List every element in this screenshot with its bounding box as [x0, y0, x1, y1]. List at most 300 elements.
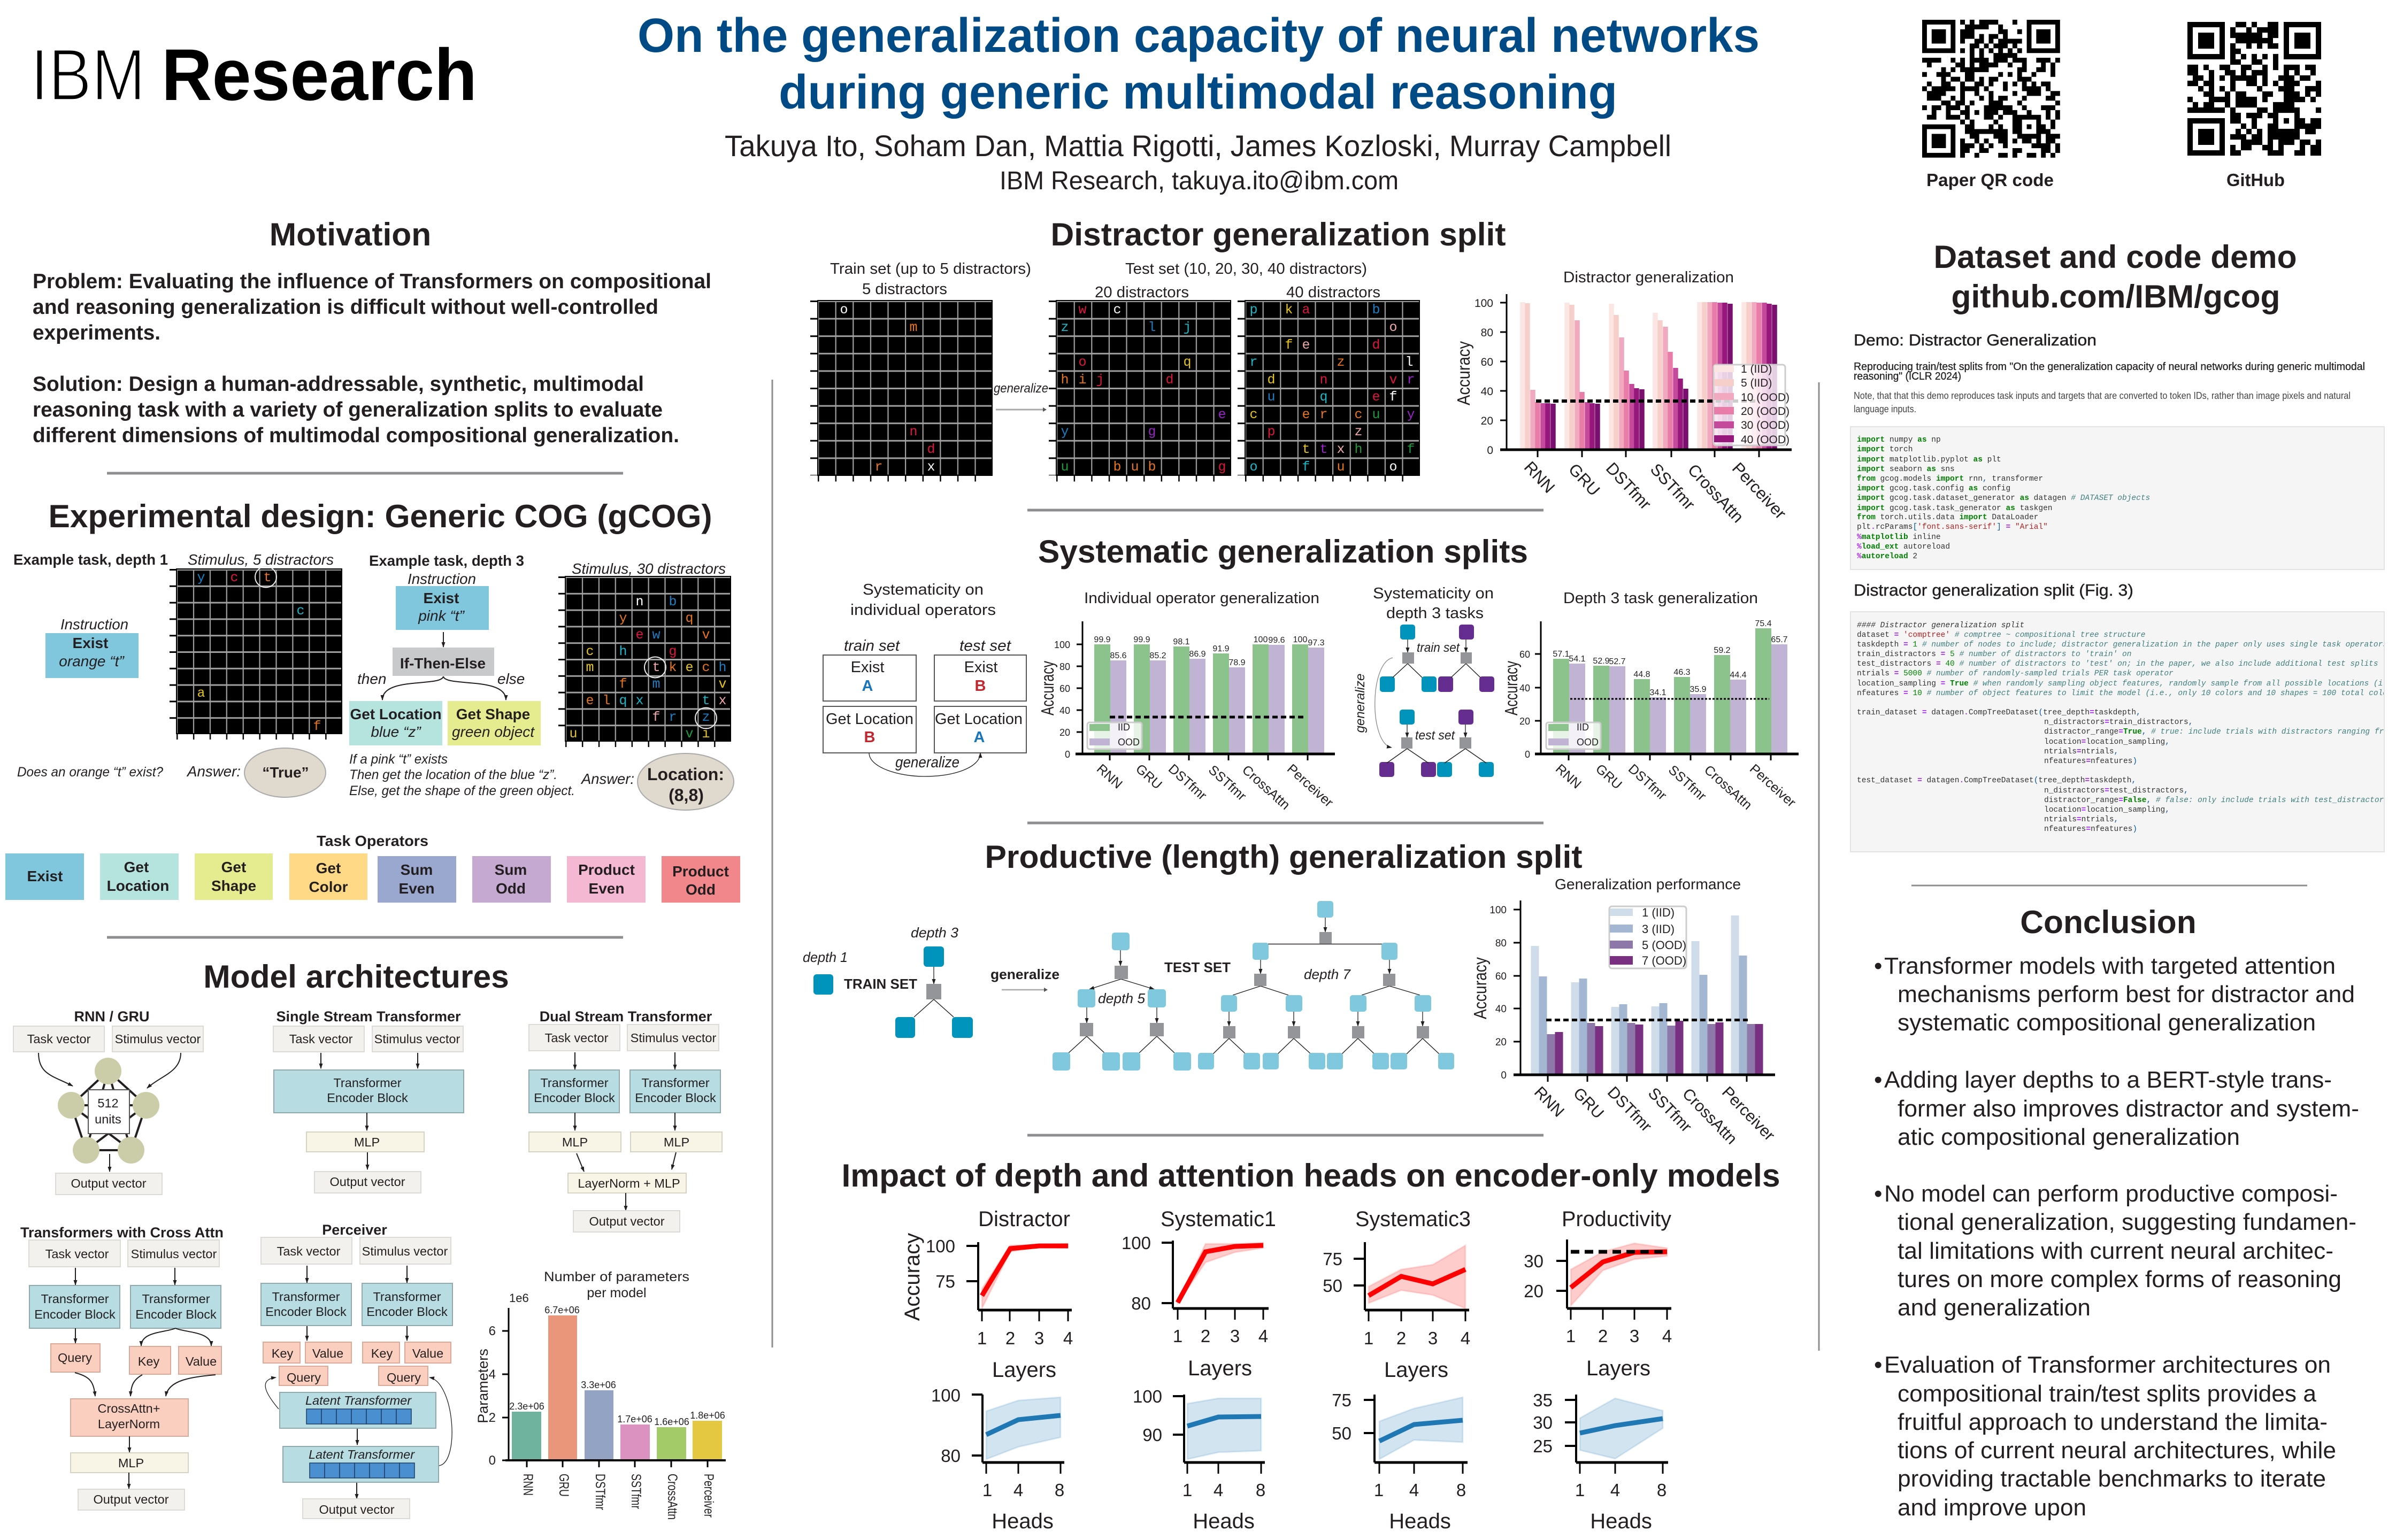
diagram: depth 3 test set trees	[1379, 710, 1494, 777]
box: exist pink t	[396, 586, 489, 630]
chart: depth 3 task generalization: OOD	[1577, 737, 1599, 748]
operator boxes: train and test: Get Location	[826, 711, 913, 728]
chart: systematic3 heads: Heads	[1389, 1510, 1451, 1533]
diagram: perceiver: Task vector	[277, 1244, 341, 1258]
arrow: generalize arc	[869, 753, 980, 776]
label: then: then	[357, 671, 386, 687]
chart: systematic3 heads: 1	[1374, 1480, 1384, 1500]
chart: individual operator generalization: 60	[1059, 683, 1070, 694]
stimulus grid: 30 distractors: v	[718, 676, 727, 692]
code block: dataset split: location=location_sampling,	[2044, 738, 2170, 746]
chart: distractor generalization: Perceiver	[1729, 459, 1790, 523]
label: systematicity on depth 3 tasks: Systematicity on	[1373, 585, 1494, 602]
chart: distractor generalization: 0	[1487, 444, 1493, 457]
chart: distractor layers: 100	[926, 1236, 955, 1256]
chart: number of parameters per model: 1e6	[509, 1291, 529, 1305]
grid: test 40 distractors: p	[1267, 424, 1276, 440]
stimulus grid: 30 distractors: x	[718, 693, 727, 709]
chart: individual operator generalization: Accuracy	[1038, 661, 1057, 715]
box: get shape green object	[448, 701, 541, 745]
code block: dataset split: nfeatures = 10 # number of object features to limit the model (i.e., only 10 colors and 10 shapes = 100 total colored	[1857, 689, 2396, 698]
code block: dataset split: distractor_range=False, # false: only include trials with test_distractors	[2044, 796, 2389, 805]
grid: test 40 distractors: b	[1372, 302, 1380, 318]
heading: Motivation: Motivation	[270, 216, 431, 252]
stimulus grid: 5 distractors: y	[197, 570, 205, 586]
chart: individual operator generalization: 20	[1059, 727, 1070, 738]
text block: depth 3 explanation	[349, 752, 575, 798]
chart: individual operator generalization: Perceiver	[1284, 761, 1336, 810]
code block: imports: import torch	[1857, 445, 1913, 454]
chart: distractor generalization: 20 (OOD)	[1741, 405, 1790, 418]
grid: test 40 distractors: y	[1407, 407, 1415, 422]
chart: depth 3 task generalization: 75.4	[1755, 619, 1772, 628]
stimulus grid: 30 distractors: u	[569, 726, 578, 742]
chart: number of parameters per model	[475, 1269, 726, 1520]
chart: distractor heads: 8	[1055, 1480, 1064, 1500]
diagram: RNN / GRU	[13, 1008, 203, 1195]
chart: systematic1 heads: Heads	[1193, 1510, 1255, 1533]
QR code: GitHub	[2187, 22, 2321, 190]
code block: imports: import gcog.task.dataset_generator as datagen # DATASET objects	[1857, 494, 2150, 503]
chart: productivity layers: 3	[1630, 1326, 1639, 1346]
chart: individual operator generalization: 85.6	[1110, 651, 1127, 660]
diagram: perceiver: Key	[272, 1346, 293, 1360]
text block: problem and solution: different dimensions of multimodal compositional generalization.	[33, 424, 679, 447]
text block: problem and solution: Problem: Evaluating the influence of Transformers on compositional	[33, 270, 711, 293]
grid: train 5 distractors: n	[909, 424, 918, 440]
code block: dataset split	[1850, 612, 2396, 852]
chart: depth 3 task generalization: 59.2	[1714, 646, 1731, 655]
label: 40 distractors: 40 distractors	[1286, 284, 1380, 301]
code block: imports: import seaborn as sns	[1857, 465, 1955, 474]
chart: individual operator generalization: SSTfmr	[1205, 763, 1249, 804]
chart: depth 3 task generalization: RNN	[1553, 761, 1584, 792]
bullet text: conclusions: tional generalization, suggesting fundamen-	[1898, 1209, 2356, 1235]
chart: productivity heads: Heads	[1590, 1510, 1652, 1533]
chart: individual operator generalization: 99.9	[1133, 635, 1150, 644]
chart: systematic3 layers	[1323, 1207, 1471, 1382]
diagram: perceiver: Query	[287, 1370, 321, 1384]
chart: systematic1 heads: 8	[1256, 1480, 1265, 1500]
grid: test 40 distractors: u	[1337, 459, 1345, 475]
diagram: single stream transformer: MLP	[354, 1135, 380, 1149]
grid: test 40 distractors: v	[1389, 372, 1397, 388]
code block: imports: from gcog.models import rnn, transformer	[1857, 475, 2043, 483]
bullet text: conclusions: former also improves distractor and system-	[1898, 1096, 2359, 1122]
chart: distractor generalization: 20	[1481, 415, 1493, 427]
diagram: single stream transformer: Stimulus vector	[374, 1032, 460, 1046]
chart: number of parameters per model: 0	[489, 1453, 496, 1468]
chart: generalization performance: Generalization performance	[1555, 876, 1741, 892]
chart: systematic1 layers: Layers	[1188, 1357, 1252, 1380]
chart: generalization performance: 7 (OOD)	[1642, 954, 1686, 967]
diagram: perceiver: Value	[412, 1346, 443, 1360]
diagram: single stream transformer	[273, 1008, 464, 1193]
stimulus grid: 30 distractors: q	[685, 611, 694, 626]
chart: individual operator generalization: 85.2	[1149, 651, 1166, 660]
bullet text: conclusions: Transformer models with targeted attention	[1884, 953, 2336, 979]
chart: generalization performance: 1 (IID)	[1642, 906, 1675, 919]
chart: depth 3 task generalization: 20	[1519, 716, 1530, 727]
chart: distractor generalization: 30 (OOD)	[1741, 419, 1790, 432]
heading: model architectures: Model architectures	[203, 958, 509, 995]
chart: number of parameters per model: SSTfmr	[628, 1474, 643, 1509]
grid: test 40 distractors: f	[1285, 337, 1293, 353]
grid: test 20 distractors: o	[1078, 355, 1087, 370]
chart: generalization performance: 20	[1495, 1037, 1507, 1048]
grid: test 40 distractors: c	[1354, 407, 1363, 422]
bullet text: conclusions: tions of current neural architectures, while	[1898, 1437, 2336, 1464]
diagram: dual stream transformer: Transformer	[540, 1076, 609, 1090]
chart: systematic1 heads: 4	[1214, 1480, 1223, 1500]
chart: number of parameters per model: 2.3e+06	[509, 1401, 544, 1412]
bullet text: conclusions: •	[1874, 1352, 1882, 1378]
bullet text: conclusions: Evaluation of Transformer architectures on	[1884, 1352, 2331, 1378]
stimulus grid: 30 distractors: q	[619, 693, 627, 709]
label: train set: TRAIN SET	[844, 976, 917, 992]
chart: depth 3 task generalization: GRU	[1593, 761, 1625, 792]
heading: task operators: Task Operators	[317, 833, 428, 849]
chart: generalization performance: 5 (OOD)	[1642, 938, 1686, 952]
stimulus grid: 30 distractors: v	[685, 726, 694, 742]
arrow: branching curve	[382, 676, 506, 700]
diagram: transformers with cross attn: Transformers with Cross Attn	[20, 1225, 224, 1241]
answer bubble: location: (8,8)	[669, 786, 704, 805]
grid: train 5 distractors: x	[927, 459, 935, 475]
operator boxes: Odd	[496, 880, 526, 897]
chart: number of parameters per model: 4	[489, 1367, 496, 1382]
chart: depth 3 task generalization: 57.1	[1553, 650, 1570, 659]
diagram: transformers with cross attn: Encoder Block	[34, 1307, 116, 1321]
diagram: perceiver: Stimulus vector	[362, 1244, 448, 1258]
chart: distractor heads: 1	[982, 1480, 992, 1500]
stimulus grid: 30 distractors: n	[635, 594, 644, 610]
chart: distractor generalization: RNN	[1520, 458, 1558, 497]
chart: depth 3 task generalization: 52.9	[1593, 657, 1610, 666]
operator boxes: Get	[124, 859, 149, 875]
chart: individual operator generalization: 86.9	[1189, 650, 1206, 659]
answer bubble: location	[638, 753, 734, 810]
heading: distractor generalization split: Distractor generalization split	[1050, 216, 1506, 252]
grid: test 40 distractors: h	[1354, 442, 1363, 457]
grid: test 20 distractors: j	[1096, 372, 1104, 388]
bullet text: conclusions: and generalization	[1898, 1295, 2091, 1321]
diagram: transformers with cross attn: LayerNorm	[98, 1417, 160, 1431]
chart: depth 3 task generalization: 0	[1525, 749, 1530, 760]
diagram: transformers with cross attn: Output vector	[93, 1492, 169, 1506]
grid: test 40 distractors: r	[1249, 355, 1258, 370]
box: get shape green object: Get Shape	[456, 706, 530, 722]
code block: imports	[1850, 427, 2384, 569]
code block: imports: %autoreload 2	[1857, 552, 1917, 561]
chart: productivity layers: Productivity	[1562, 1207, 1671, 1231]
vertical column divider left	[771, 380, 773, 1348]
title: during generic multimodal reasoning	[779, 66, 1617, 119]
grid: test 20 distractors: w	[1078, 302, 1087, 318]
text block: reproducing: Reproducing train/test splits from "On the generalization capacity of neural networks during generic multimodal	[1854, 361, 2365, 373]
heading: conclusion: Conclusion	[2020, 904, 2197, 940]
stimulus grid: 30 distractors: c	[586, 644, 594, 659]
chart: generalization performance: 80	[1495, 938, 1507, 949]
chart: distractor heads: 80	[941, 1446, 961, 1466]
chart: systematic1 heads	[1133, 1387, 1265, 1533]
text block: depth 3 explanation: Then get the location of the blue “z”.	[349, 767, 557, 782]
operator boxes: Exist	[27, 868, 63, 884]
arrow: generalize arc: generalize	[895, 754, 959, 771]
diagram: transformers with cross attn: Query	[58, 1351, 92, 1365]
code block: dataset split: taskdepth = 1 # number of nodes to include; distractor generalization in the paper only uses single task operators	[1857, 641, 2387, 649]
panel: dataset and code demo	[1850, 238, 2396, 852]
heading: systematic generalization splits: Systematic generalization splits	[1038, 533, 1528, 569]
stimulus grid: 30 distractors: t	[702, 693, 710, 709]
axis label: accuracy: Accuracy	[901, 1233, 924, 1321]
chart: number of parameters per model: DSTfmr	[593, 1474, 608, 1510]
chart: distractor generalization: GRU	[1565, 460, 1603, 499]
stimulus grid: 30 distractors: e	[586, 693, 594, 709]
chart: depth 3 task generalization: 54.1	[1569, 654, 1586, 664]
operator boxes: train and test: B	[864, 729, 875, 746]
code block: imports: %load_ext autoreload	[1857, 543, 1950, 551]
grid: test 40 distractors: f	[1389, 389, 1397, 405]
grid: test 40 distractors: o	[1389, 459, 1397, 475]
diagram: perceiver: Encoder Block	[265, 1305, 347, 1319]
chart: productivity layers: 1	[1566, 1326, 1576, 1346]
chart: individual operator generalization: 97.3	[1308, 638, 1325, 648]
grid: train 5 distractors: o	[840, 302, 848, 318]
chart: individual operator generalization: 100	[1054, 640, 1070, 650]
stimulus grid: 5 distractors: c	[230, 570, 239, 586]
chart: number of parameters per model: 2	[489, 1411, 496, 1425]
chart: systematic3 heads: 50	[1332, 1423, 1351, 1443]
label: example task depth 3: Example task, depth 3	[369, 552, 524, 569]
bullet text: conclusions: •	[1874, 1181, 1882, 1207]
grid: test 40 distractors: e	[1302, 407, 1310, 422]
heading: experimental design: Experimental design: Generic COG (gCOG)	[48, 498, 712, 534]
chart: distractor generalization: 80	[1481, 327, 1493, 339]
diagram: RNN / GRU: Output vector	[71, 1176, 147, 1190]
label: stimulus 30 distractors: Stimulus, 30 distractors	[572, 560, 726, 577]
operator boxes: Product	[578, 861, 635, 878]
panel: systematic generalization splits	[823, 533, 1799, 813]
diagram: transformers with cross attn: Encoder Block	[135, 1307, 217, 1321]
chart: depth 3 task generalization: 44.8	[1633, 670, 1650, 679]
diagram: transformers with cross attn: Value	[186, 1354, 217, 1368]
chart: number of parameters per model: 6.7e+06	[544, 1305, 580, 1315]
node: train set depth 1	[813, 974, 833, 995]
chart: depth 3 task generalization: SSTfmr	[1665, 763, 1709, 804]
chart: individual operator generalization: Individual operator generalization	[1084, 590, 1319, 607]
diagram: dual stream transformer: Dual Stream Transformer	[540, 1008, 712, 1025]
chart: individual operator generalization: 78.9	[1228, 658, 1246, 667]
chart: systematic3 heads: 8	[1456, 1480, 1466, 1500]
grid: test 40 distractors: d	[1267, 372, 1276, 388]
chart: productivity layers: 20	[1524, 1281, 1543, 1301]
chart: number of parameters per model: CrossAttn	[665, 1474, 680, 1520]
chart: number of parameters per model: Perceiver	[701, 1474, 716, 1518]
operator boxes: Sum	[495, 861, 527, 878]
stimulus grid: 30 distractors: h	[619, 644, 627, 659]
diagram: perceiver: Value	[312, 1346, 343, 1360]
code block: dataset split: n_distractors=test_distractors,	[2044, 787, 2188, 795]
chart: distractor generalization: 1 (IID)	[1741, 363, 1772, 375]
diagram: perceiver: Encoder Block	[366, 1305, 448, 1319]
operator boxes: Sum	[401, 861, 433, 878]
stimulus grid: 30 distractors: w	[652, 627, 661, 643]
arrow: generalize depth 3: generalize	[1353, 674, 1368, 733]
label: systematicity on individual operators: individual operators	[850, 602, 996, 619]
logo: IBM Research	[30, 34, 477, 116]
box: exist orange t	[45, 633, 139, 678]
chart: distractor generalization: 5 (IID)	[1741, 377, 1772, 389]
label: else: else	[497, 671, 525, 687]
chart: generalization performance: SSTfmr	[1645, 1084, 1695, 1136]
chart: individual operator generalization: 100	[1293, 635, 1307, 644]
diagram: depth 3 train set trees	[1380, 625, 1494, 692]
text block: note: language inputs.	[1854, 404, 1916, 414]
chart: distractor layers	[926, 1207, 1073, 1382]
chart: distractor layers: Layers	[992, 1358, 1056, 1382]
diagram: dual stream transformer: Encoder Block	[635, 1091, 716, 1105]
bullet text: conclusions: •	[1874, 953, 1882, 979]
grid: train 5 distractors: d	[927, 442, 935, 457]
grid: test 40 distractors: n	[1319, 372, 1328, 388]
text block: problem and solution: and reasoning generalization is difficult without well-controlled	[33, 296, 658, 319]
chart: individual operator generalization: IID	[1118, 722, 1130, 733]
chart: systematic1 layers: 100	[1122, 1233, 1151, 1253]
label: test set: TEST SET	[1164, 959, 1231, 975]
operator boxes: train and test: Get Location	[935, 711, 1023, 728]
stimulus grid: 30 distractors: r	[669, 710, 677, 725]
bullet text: conclusions: No model can perform productive composi-	[1884, 1181, 2338, 1207]
bullet text: conclusions: •	[1874, 1067, 1882, 1093]
diagram: dual stream transformer: Stimulus vector	[631, 1031, 716, 1045]
chart: depth 3 task generalization: DSTfmr	[1625, 761, 1670, 803]
title: On the generalization capacity of neural networks	[638, 9, 1760, 63]
stimulus grid: 30 distractors	[562, 576, 731, 744]
box: if-then-else	[393, 648, 494, 676]
grid: test 20 distractors: l	[1148, 320, 1156, 335]
chart: depth 3 task generalization: 34.1	[1649, 688, 1667, 697]
chart: distractor generalization: SSTfmr	[1647, 460, 1699, 514]
code block: dataset split: distractor_range=True, # true: include trials with distractors ranging from	[2044, 728, 2393, 736]
stimulus grid: 30 distractors: c	[702, 660, 710, 675]
code block: dataset split: ntrials = 5000 # number of randomly-sampled trials PER task operator	[1857, 669, 2174, 678]
grid: test 20 distractors: b	[1148, 459, 1156, 475]
operator boxes: Get	[316, 860, 341, 876]
grid: test 40 distractors: c	[1249, 407, 1258, 422]
stimulus grid: 30 distractors: k	[669, 660, 677, 675]
chart: generalization performance: Perceiver	[1718, 1083, 1778, 1144]
grid: test 40 distractors: d	[1372, 337, 1380, 353]
operator boxes: Even	[589, 880, 624, 897]
diagram: RNN / GRU: RNN / GRU	[74, 1008, 150, 1025]
diagram: perceiver: Latent Transformer	[305, 1393, 412, 1407]
bullet text: conclusions: mechanisms perform best for distractor and	[1898, 981, 2355, 1007]
chart: depth 3 task generalization: 60	[1519, 649, 1530, 660]
chart: productivity layers: 2	[1598, 1326, 1608, 1346]
affiliation: IBM Research, takuya.ito@ibm.com	[1000, 167, 1399, 195]
diagram: perceiver: Key	[371, 1346, 393, 1360]
grid: test 40 distractors: k	[1285, 302, 1293, 318]
grid: test 20 distractors: i	[1078, 372, 1087, 388]
diagram: transformers with cross attn	[20, 1225, 224, 1510]
grid: test 40 distractors: f	[1407, 442, 1415, 457]
chart: generalization performance: 0	[1501, 1070, 1507, 1081]
chart: distractor layers: 2	[1005, 1328, 1015, 1348]
chart: systematic1 heads: 90	[1142, 1425, 1162, 1445]
diagram: dual stream transformer: Task vector	[545, 1031, 609, 1045]
panel: conclusion	[1874, 904, 2359, 1521]
text block: depth 3 explanation: Else, get the shape of the green object.	[349, 783, 575, 798]
answer bubble: True: “True”	[262, 764, 309, 781]
box: exist pink t: Exist	[424, 590, 459, 606]
grid: test 20 distractors: g	[1218, 459, 1226, 475]
grid: test 40 distractors	[1241, 301, 1419, 478]
code block: dataset split: ntrials=ntrials,	[2044, 748, 2118, 756]
chart: individual operator generalization: 99.6	[1268, 636, 1285, 645]
stimulus grid: 30 distractors: z	[702, 710, 710, 725]
QR caption: paper: Paper QR code	[1926, 170, 2054, 190]
code block: dataset split: test_dataset = datagen.CompTreeDataset(tree_depth=taskdepth,	[1857, 776, 2136, 785]
logo: IBM Research: Research	[162, 34, 477, 116]
label: train set: train set	[844, 637, 901, 654]
chart: productivity heads: 35	[1533, 1390, 1553, 1410]
chart: depth 3 task generalization: CrossAttn	[1701, 763, 1755, 813]
arrow: generalize depth 3	[1353, 658, 1393, 748]
title	[638, 9, 1760, 119]
authors: Takuya Ito, Soham Dan, Mattia Rigotti, James Kozloski, Murray Campbell	[725, 129, 1671, 163]
label: depth 1: depth 1	[803, 949, 848, 965]
vertical column divider right	[1818, 382, 1819, 1351]
text block: problem and solution: Solution: Design a human-addressable, synthetic, multimodal	[33, 373, 644, 396]
chart: systematic3 heads	[1332, 1390, 1468, 1533]
grid: train 5 distractors	[814, 301, 992, 478]
chart: systematic1 layers: Systematic1	[1161, 1207, 1276, 1231]
code block: imports: from torch.utils.data import DataLoader	[1857, 513, 2038, 522]
grid: test 20 distractors: z	[1061, 320, 1069, 335]
chart: systematic1 heads: 100	[1133, 1387, 1162, 1406]
code block: dataset split: location=location_sampling,	[2044, 806, 2170, 814]
chart: individual operator generalization: 0	[1065, 749, 1070, 760]
text block: problem and solution	[33, 270, 711, 447]
chart: number of parameters per model: 3.3e+06	[581, 1380, 616, 1390]
code block: dataset split: dataset = 'comptree' # comptree ~ compositional tree structure	[1857, 631, 2146, 640]
panel: experimental design	[5, 498, 740, 903]
operator boxes: train and test: Exist	[851, 659, 884, 676]
diagram: dual stream transformer: Transformer	[641, 1076, 710, 1090]
grid: test 20 distractors: h	[1061, 372, 1069, 388]
operator boxes: train and test: Exist	[964, 659, 997, 676]
grid: test 40 distractors: q	[1319, 389, 1328, 405]
answer label: Answer:	[186, 763, 241, 780]
chart: systematic3 layers: 1	[1364, 1328, 1373, 1348]
grid: test 20 distractors	[1053, 301, 1231, 478]
code block: imports: import numpy as np	[1857, 436, 1941, 444]
chart: distractor layers: 3	[1034, 1328, 1044, 1348]
chart: distractor heads: Heads	[992, 1510, 1054, 1533]
grid: test 40 distractors: o	[1249, 459, 1258, 475]
diagram: depth 3 train set trees: train set	[1417, 641, 1460, 655]
grid: test 40 distractors: u	[1267, 389, 1276, 405]
chart: systematic1 layers: 80	[1131, 1293, 1151, 1313]
chart: systematic1 layers: 1	[1173, 1326, 1182, 1346]
tree: depth 3 train	[895, 946, 973, 1038]
stimulus grid: 30 distractors: f	[652, 710, 661, 725]
diagram: RNN / GRU: Stimulus vector	[115, 1032, 201, 1046]
diagram: transformers with cross attn: CrossAttn+	[98, 1402, 160, 1415]
chart: distractor generalization: CrossAttn	[1684, 460, 1747, 526]
text block: reproducing: reasoning" (ICLR 2024)	[1854, 371, 1961, 382]
